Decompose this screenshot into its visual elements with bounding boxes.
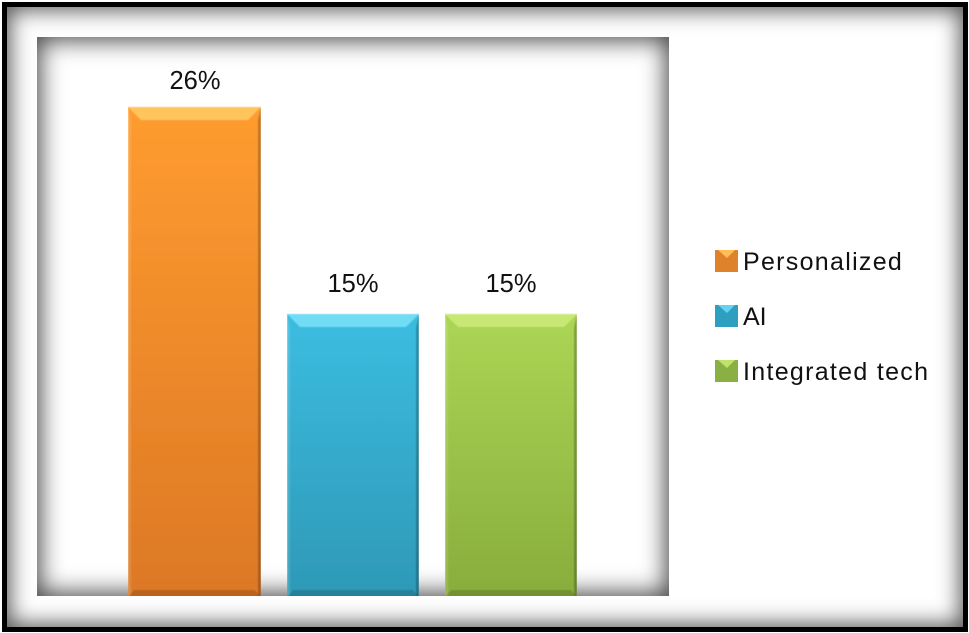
bar: AI 15% [287, 314, 419, 602]
bar: Integrated tech 15% [445, 314, 577, 602]
legend icon: AI [715, 305, 738, 327]
value label: 26%: 26% [169, 67, 221, 95]
legend icon: Integrated tech [715, 360, 738, 382]
value label: 15% AI: 15% [327, 270, 379, 298]
panel: chart plot area [37, 37, 669, 596]
bar: Personalized 26% [128, 107, 261, 602]
legend icon: Personalized [715, 250, 738, 272]
bar chart [128, 106, 577, 596]
legend label: Personalized: Personalized [743, 248, 903, 276]
value label: 15% Integrated tech: 15% [485, 270, 537, 298]
legend label: AI: AI [743, 303, 767, 331]
legend label: Integrated tech: Integrated tech [743, 358, 929, 386]
legend [715, 250, 738, 382]
